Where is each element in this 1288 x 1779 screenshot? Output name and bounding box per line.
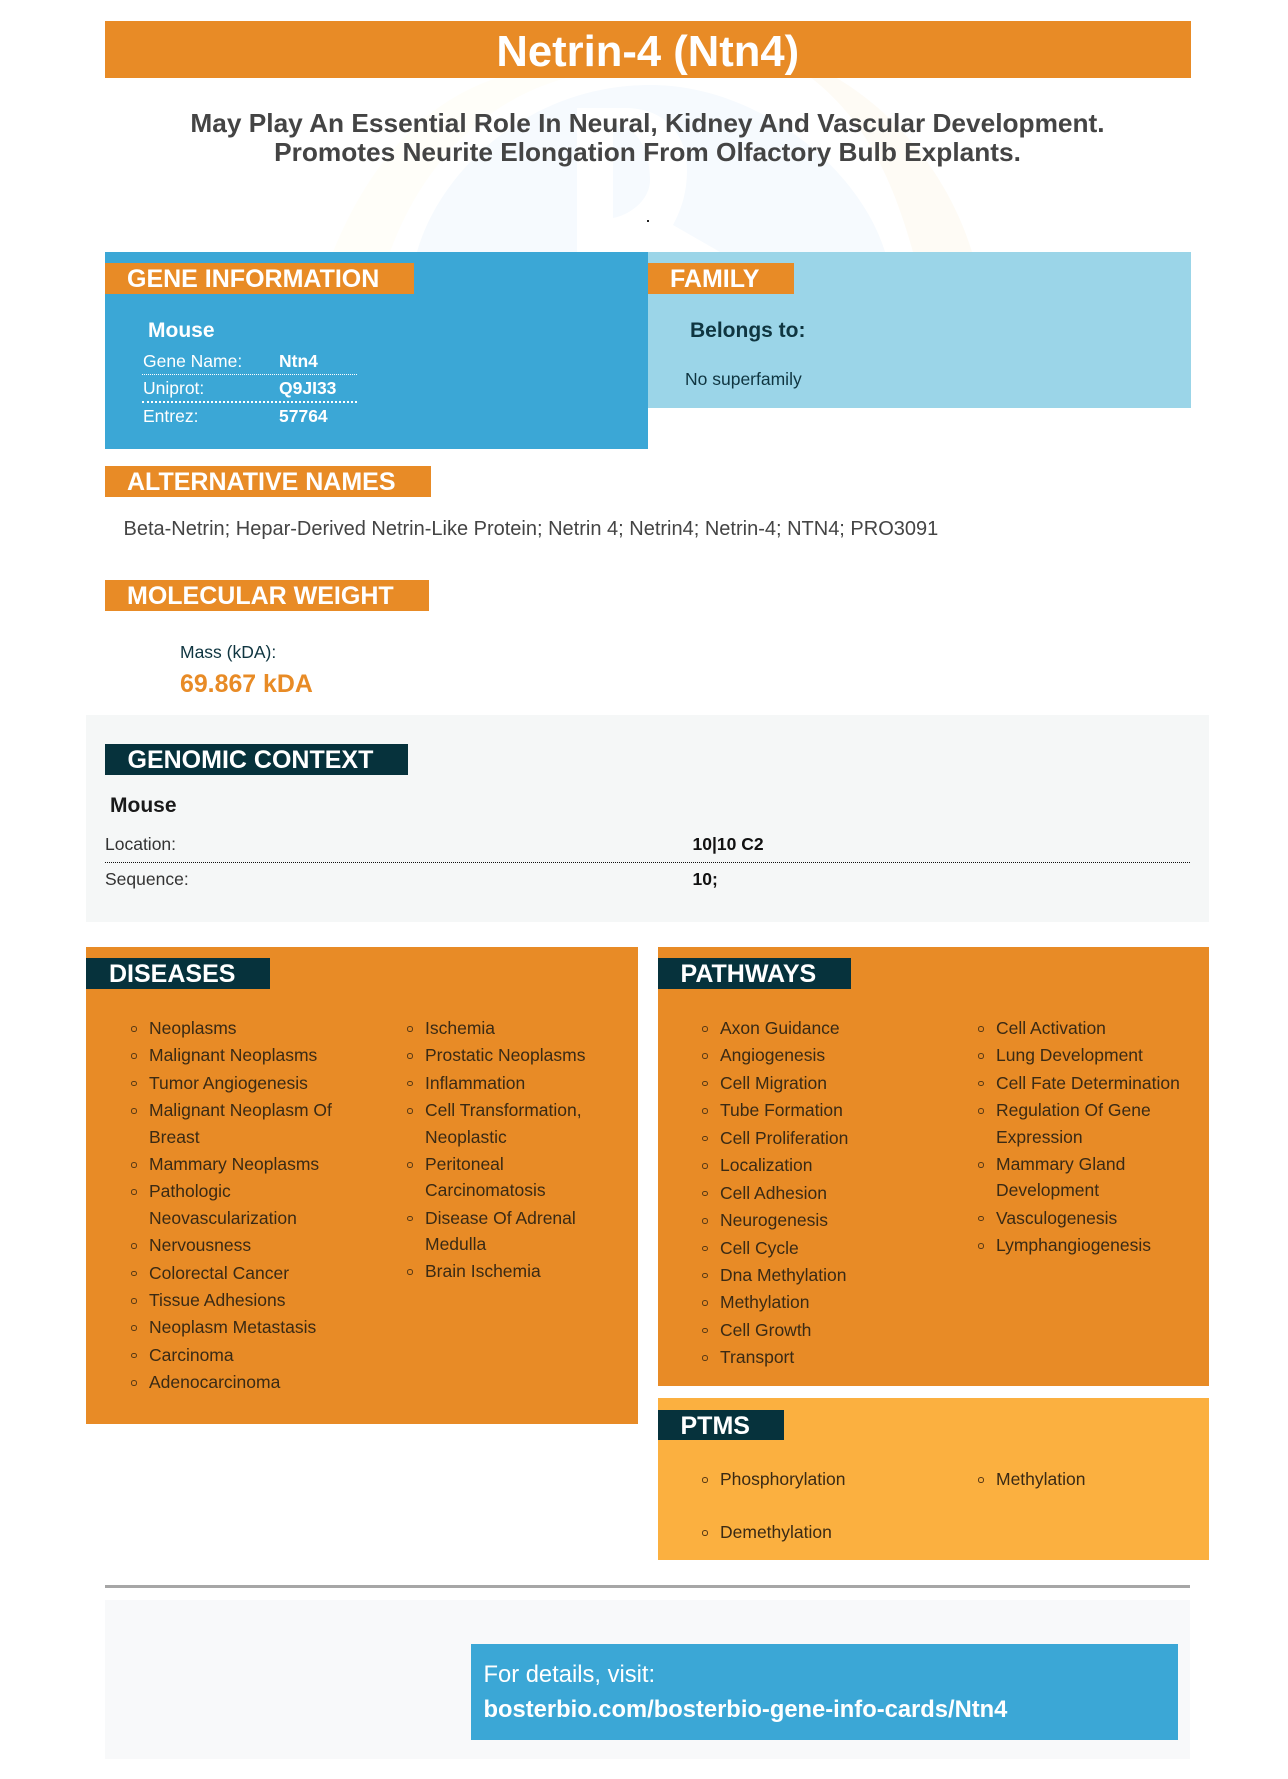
heading: alternative names: ALTERNATIVE NAMES bbox=[127, 468, 396, 496]
pathways list column 2: Mammary Gland bbox=[996, 1154, 1125, 1174]
diseases list column 2: Inflammation bbox=[425, 1073, 525, 1093]
pathways list column 2: Cell Activation bbox=[996, 1018, 1106, 1038]
pathways list column 2: Expression bbox=[996, 1127, 1083, 1147]
entrez row: Entrez: bbox=[143, 406, 198, 426]
subtitle: Promotes Neurite Elongation From Olfactory Bulb Explants. bbox=[274, 137, 1021, 167]
location row bbox=[105, 829, 1190, 863]
heading: pathways: PATHWAYS bbox=[680, 960, 816, 988]
diseases list column 1: Breast bbox=[149, 1127, 200, 1147]
panel: gene information bbox=[105, 252, 648, 449]
species label: Mouse bbox=[110, 794, 177, 817]
diseases list column 1: Tumor Angiogenesis bbox=[149, 1073, 308, 1093]
heading: gene information: GENE INFORMATION bbox=[127, 265, 379, 293]
heading: ptms bbox=[658, 1410, 784, 1440]
diseases list column 1: Malignant Neoplasms bbox=[149, 1045, 317, 1065]
diseases list column 1: Pathologic bbox=[149, 1181, 231, 1201]
belongs to label: Belongs to: bbox=[690, 319, 806, 342]
pathways list column 1: Cell Growth bbox=[720, 1320, 811, 1340]
species label: Mouse bbox=[148, 319, 215, 342]
panel: pathways bbox=[658, 947, 1209, 1386]
heading: family: FAMILY bbox=[670, 265, 759, 293]
alternative names text: Beta-Netrin; Hepar-Derived Netrin-Like Protein; Netrin 4; Netrin4; Netrin-4; NTN4; PRO3091 bbox=[124, 518, 938, 540]
pathways list column 1: Cell Adhesion bbox=[720, 1183, 827, 1203]
mass label: Mass (kDA): bbox=[180, 642, 276, 662]
sequence row: Sequence: bbox=[105, 869, 189, 889]
pathways list column 2: Regulation Of Gene bbox=[996, 1100, 1151, 1120]
location row: 10|10 C2 bbox=[692, 834, 764, 854]
heading: genomic context: GENOMIC CONTEXT bbox=[128, 746, 373, 774]
pathways list column 2: Lymphangiogenesis bbox=[996, 1235, 1151, 1255]
panel: genomic context bbox=[86, 715, 1209, 922]
entrez row bbox=[143, 406, 328, 426]
diseases list column 1: Mammary Neoplasms bbox=[149, 1154, 319, 1174]
gene name row: Gene Name: bbox=[143, 351, 242, 371]
pathways list column 1: Tube Formation bbox=[720, 1100, 843, 1120]
diseases list column 1: Neoplasm Metastasis bbox=[149, 1317, 316, 1337]
heading: molecular weight: MOLECULAR WEIGHT bbox=[127, 582, 394, 610]
diseases list column 1: Nervousness bbox=[149, 1235, 251, 1255]
uniprot row: Uniprot: bbox=[143, 378, 204, 398]
diseases list column 2: Carcinomatosis bbox=[425, 1180, 546, 1200]
pathways list column 2: Cell Fate Determination bbox=[996, 1073, 1180, 1093]
diseases list column 1: Tissue Adhesions bbox=[149, 1290, 286, 1310]
ptms list column 1: Phosphorylation bbox=[720, 1469, 846, 1489]
watermark logo bbox=[418, 78, 972, 252]
heading: diseases: DISEASES bbox=[109, 960, 235, 988]
subtitle bbox=[190, 108, 1105, 167]
pathways list column 1: Localization bbox=[720, 1155, 812, 1175]
pathways list column 2: Vasculogenesis bbox=[996, 1208, 1117, 1228]
diseases list column 2: Peritoneal bbox=[425, 1154, 504, 1174]
diseases list column 1: Malignant Neoplasm Of bbox=[149, 1100, 332, 1120]
ptms list column 1 bbox=[702, 1469, 846, 1542]
diseases list column 1: Adenocarcinoma bbox=[149, 1372, 280, 1392]
panel: footer bbox=[105, 1600, 1190, 1759]
callout: details link bbox=[471, 1644, 1178, 1740]
gene name row: Ntn4 bbox=[279, 351, 318, 371]
ptms list column 2: Methylation bbox=[996, 1469, 1086, 1489]
pathways list column 1: Methylation bbox=[720, 1292, 810, 1312]
panel: ptms bbox=[658, 1398, 1209, 1560]
pathways list column 1: Transport bbox=[720, 1347, 794, 1367]
pathways list column 1: Cell Migration bbox=[720, 1073, 827, 1093]
diseases list column 1 bbox=[131, 1018, 332, 1392]
diseases list column 2: Ischemia bbox=[425, 1018, 495, 1038]
gene name row bbox=[142, 348, 357, 375]
heading: diseases bbox=[86, 958, 270, 989]
pathways list column 1: Axon Guidance bbox=[720, 1018, 840, 1038]
pathways list column 1: Angiogenesis bbox=[720, 1045, 825, 1065]
diseases list column 1: Neoplasms bbox=[149, 1018, 237, 1038]
sequence row: 10; bbox=[692, 869, 718, 889]
pathways list column 2 bbox=[978, 1018, 1180, 1255]
pathways list column 2: Lung Development bbox=[996, 1045, 1143, 1065]
heading: family bbox=[648, 263, 794, 294]
ptms list column 1: Demethylation bbox=[720, 1522, 832, 1542]
callout label: For details, visit: bbox=[484, 1661, 655, 1688]
footer divider bbox=[105, 1585, 1190, 1588]
pathways list column 1: Cell Proliferation bbox=[720, 1128, 848, 1148]
dot mark bbox=[647, 220, 649, 222]
diseases list column 2: Disease Of Adrenal bbox=[425, 1208, 576, 1228]
uniprot row bbox=[142, 375, 357, 403]
panel: diseases bbox=[86, 947, 638, 1424]
diseases list column 1: Neovascularization bbox=[149, 1208, 297, 1228]
family value: No superfamily bbox=[685, 369, 802, 389]
location row: Location: bbox=[105, 834, 176, 854]
panel: family bbox=[648, 252, 1190, 408]
diseases list column 2: Medulla bbox=[425, 1234, 486, 1254]
diseases list column 2: Prostatic Neoplasms bbox=[425, 1045, 585, 1065]
pathways list column 1: Neurogenesis bbox=[720, 1210, 828, 1230]
heading: pathways bbox=[658, 958, 851, 989]
sequence row bbox=[105, 869, 718, 889]
callout url: bosterbio.com/bosterbio-gene-info-cards/Ntn4 bbox=[484, 1696, 1007, 1723]
diseases list column 1: Carcinoma bbox=[149, 1345, 234, 1365]
diseases list column 1: Colorectal Cancer bbox=[149, 1263, 289, 1283]
uniprot row: Q9JI33 bbox=[279, 378, 336, 398]
mass value: 69.867 kDA bbox=[180, 670, 313, 698]
title banner: Netrin-4 (Ntn4) bbox=[496, 28, 799, 76]
diseases list column 2: Brain Ischemia bbox=[425, 1261, 541, 1281]
heading: ptms: PTMS bbox=[680, 1412, 750, 1440]
subtitle: May Play An Essential Role In Neural, Kidney And Vascular Development. bbox=[190, 108, 1105, 138]
pathways list column 1: Dna Methylation bbox=[720, 1265, 846, 1285]
diseases list column 2: Cell Transformation, bbox=[425, 1100, 582, 1120]
diseases list column 2 bbox=[407, 1018, 585, 1281]
pathways list column 2: Development bbox=[996, 1180, 1099, 1200]
title banner bbox=[105, 21, 1190, 78]
diseases list column 2: Neoplastic bbox=[425, 1127, 507, 1147]
entrez row: 57764 bbox=[279, 406, 328, 426]
pathways list column 1 bbox=[702, 1018, 848, 1367]
pathways list column 1: Cell Cycle bbox=[720, 1238, 799, 1258]
